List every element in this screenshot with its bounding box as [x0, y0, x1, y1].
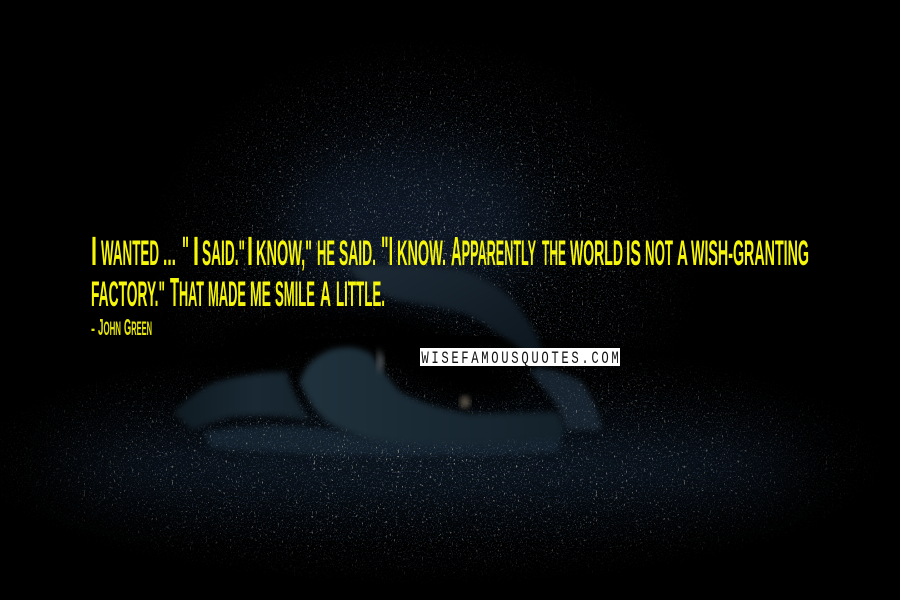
figure: reclining body silhouette — [173, 265, 563, 445]
quote line 1: KNOW," — [256, 234, 312, 273]
figure: hair detail — [377, 348, 384, 375]
background: dim blue nebula and ground — [60, 145, 800, 507]
quote line 1: WANTED — [101, 234, 159, 273]
quote line 1: I — [91, 228, 97, 274]
watermark badge: WISEFAMOUSQUOTES.COM — [421, 348, 619, 369]
quote line 1: I — [193, 228, 199, 274]
dark shadow behind the figure — [190, 307, 525, 401]
figure: speckled forearm — [530, 367, 602, 430]
figure: extended thigh — [173, 372, 310, 430]
quote line 2: MADE — [208, 275, 246, 314]
figure: foot detail — [460, 396, 470, 408]
text: GREEN — [124, 314, 152, 340]
quote line 1: HE — [317, 234, 335, 273]
quote line 1: NOT — [645, 234, 673, 273]
figure: raised arm — [347, 265, 541, 367]
quote line 2 — [91, 269, 385, 315]
quote line 1: APPARENTLY — [451, 228, 536, 274]
quote line 2: FACTORY." — [91, 275, 165, 314]
quote line 1: A — [677, 234, 688, 273]
quote line 1: "I — [381, 228, 393, 274]
quote line 1: IS — [626, 234, 641, 273]
quote line 1: ... — [163, 234, 176, 273]
quote line 1: I — [247, 228, 253, 274]
quote line 1: SAID." — [202, 234, 245, 273]
quote line 2: THAT — [170, 269, 204, 315]
quote line 1: THE — [542, 234, 566, 273]
author attribution: JOHN — [98, 314, 121, 340]
quote line 1: KNOW. — [397, 234, 446, 273]
quote line 1 — [91, 228, 809, 274]
quote text: LITTLE. — [336, 275, 385, 314]
quote line 1: WORLD — [570, 234, 623, 273]
quote line 1: SAID. — [339, 234, 376, 273]
quote line 1: " — [182, 228, 189, 274]
author attribution: - — [91, 319, 95, 340]
quote line 2: ME — [250, 275, 271, 314]
figure: hip and torso — [300, 347, 563, 445]
quote line 2: A — [320, 275, 331, 314]
quote line 2: SMILE — [275, 275, 315, 314]
quote text — [91, 228, 809, 315]
ground under the figure — [205, 426, 560, 456]
